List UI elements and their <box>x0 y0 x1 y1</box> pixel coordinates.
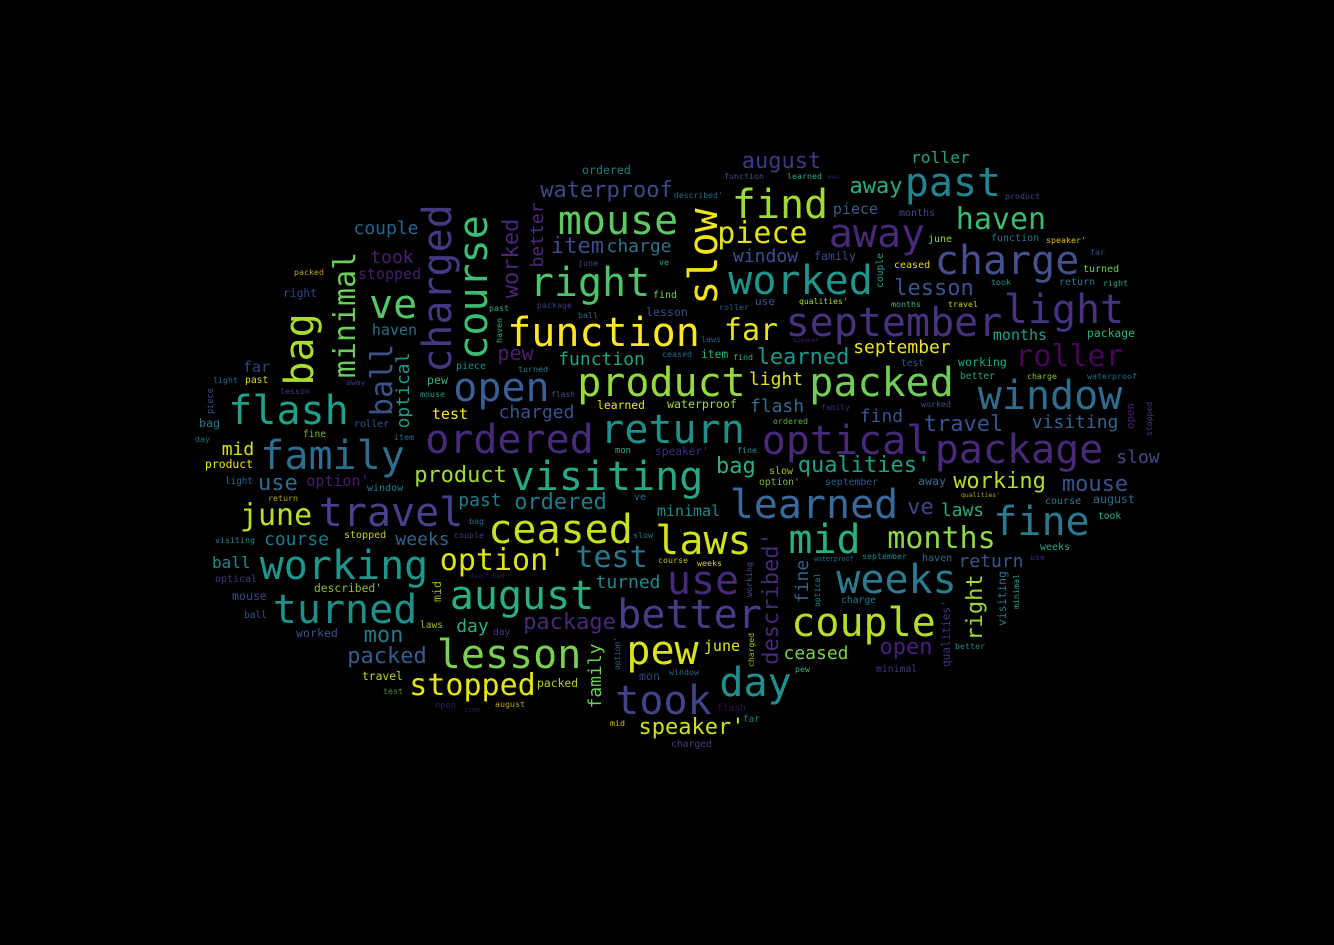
word: course (rotated): course <box>451 215 497 360</box>
rotated small words: option' <box>613 637 622 670</box>
small words: ceased <box>662 349 692 359</box>
medium words: ve <box>907 495 934 520</box>
medium words: june <box>704 637 740 655</box>
small words: learned <box>787 171 822 181</box>
small words: better <box>955 641 985 651</box>
word: charge: charge <box>935 238 1079 284</box>
small words: travel <box>362 670 403 683</box>
word: window: window <box>978 373 1123 419</box>
medium words: test <box>432 405 468 423</box>
word: september: september <box>786 300 1002 346</box>
word: function: function <box>507 310 700 356</box>
rotated medium words: better <box>527 202 548 268</box>
small words: roller <box>719 302 749 312</box>
rotated small words: couple <box>875 253 886 288</box>
medium words: minimal <box>657 502 720 520</box>
small words: item <box>464 706 480 714</box>
small words: ordered <box>582 163 631 177</box>
medium words: charged <box>499 402 574 423</box>
word: couple: couple <box>791 600 936 646</box>
word: packed: packed <box>809 360 954 406</box>
word: pew: pew <box>626 628 700 674</box>
small words: speaker' <box>1046 235 1086 245</box>
word: ceased: ceased <box>488 507 633 553</box>
word: mid: mid <box>788 517 861 563</box>
small words: away <box>918 474 946 488</box>
medium words: weeks <box>395 529 450 550</box>
small words: lesson <box>280 386 310 396</box>
rotated small words: optical <box>812 573 822 607</box>
small words: waterproof <box>667 397 737 411</box>
word: worked: worked <box>728 258 873 304</box>
small words: weeks <box>697 558 722 568</box>
small words: turned <box>518 364 548 374</box>
rotated small words: minimal <box>1011 574 1021 609</box>
small words: test <box>383 686 403 696</box>
small words: past <box>245 375 268 386</box>
small words: charge <box>1027 371 1057 381</box>
small words: course <box>1045 496 1081 507</box>
small words: stopped <box>344 530 386 541</box>
medium words: open <box>880 635 932 660</box>
word: past: past <box>905 160 1001 206</box>
small words: roller <box>354 419 389 430</box>
medium words: return <box>958 551 1024 572</box>
word: visiting: visiting <box>511 454 703 500</box>
small words: took <box>991 277 1011 287</box>
medium words: roller <box>911 148 970 167</box>
medium words: mid <box>222 439 254 460</box>
rotated medium words: ball <box>365 344 400 416</box>
small words: flash <box>717 703 746 714</box>
small words: ceased <box>894 260 930 271</box>
word: return: return <box>600 407 745 453</box>
medium words: pew <box>498 341 535 365</box>
small words: ve <box>634 492 646 503</box>
word: family: family <box>260 433 405 479</box>
small words: haven <box>922 553 952 564</box>
word: weeks: weeks <box>836 557 957 603</box>
medium words: test <box>575 540 648 575</box>
small words: product <box>205 457 253 471</box>
medium words: ball <box>212 553 251 572</box>
word: learned: learned <box>730 482 898 528</box>
small words: turned <box>1083 264 1119 275</box>
medium words: working <box>953 469 1046 494</box>
small words: fine <box>737 445 757 455</box>
small words: ball <box>244 610 267 621</box>
medium words: item <box>551 234 604 259</box>
small words: product <box>1005 191 1040 201</box>
small words: packed <box>294 267 324 277</box>
small words <box>195 163 1154 750</box>
small words: better <box>960 371 995 382</box>
small words: ball <box>578 310 598 320</box>
medium words: august <box>742 149 821 174</box>
word: optical: optical <box>762 418 930 464</box>
medium words: couple <box>354 218 419 239</box>
medium words: option' <box>440 543 566 578</box>
small words: september <box>825 477 878 488</box>
word: find: find <box>732 182 828 228</box>
small words: past <box>489 303 509 313</box>
word: took: took <box>615 678 712 724</box>
rotated small words: visiting <box>995 571 1009 626</box>
medium words: light <box>749 369 803 390</box>
word: travel: travel <box>319 490 463 536</box>
medium words <box>212 148 1160 740</box>
small words: return <box>268 493 298 503</box>
small words: worked <box>921 399 951 409</box>
small words: right <box>1103 278 1128 288</box>
medium words: stopped <box>409 668 536 703</box>
rotated small words: working <box>744 562 754 597</box>
small words: open <box>435 701 456 711</box>
medium words: september <box>853 337 951 358</box>
rotated small words: stopped <box>1144 402 1154 436</box>
small words: piece <box>456 361 486 372</box>
small words: june <box>578 258 598 268</box>
medium words: haven <box>956 202 1046 237</box>
small words: speaker' <box>655 445 709 458</box>
word: package: package <box>935 427 1103 473</box>
medium words: months <box>887 521 996 556</box>
medium words: waterproof <box>540 178 673 203</box>
small words: day <box>195 434 210 444</box>
small words: charge <box>841 595 876 606</box>
medium words: stopped <box>358 265 421 283</box>
small words: visiting <box>215 535 255 545</box>
medium words: day <box>456 616 489 637</box>
word: away: away <box>829 211 925 257</box>
small words: pew <box>427 373 448 387</box>
small words: package <box>1087 326 1135 340</box>
word: bag (rotated): bag <box>277 313 323 386</box>
medium words: course <box>264 529 329 550</box>
word: laws: laws <box>655 518 752 564</box>
word: slow (rotated): slow <box>681 207 727 305</box>
medium words: ceased <box>784 643 849 664</box>
word: fine: fine <box>993 499 1090 545</box>
rotated small words: qualities' <box>940 600 953 667</box>
small words: find <box>733 352 753 362</box>
large words <box>228 160 1124 724</box>
small words: waterproof <box>1087 371 1137 381</box>
medium words: option' <box>306 472 370 490</box>
word: lesson: lesson <box>437 632 581 678</box>
medium words: far <box>724 313 778 348</box>
small words: laws <box>701 334 721 344</box>
small words: far <box>743 714 760 725</box>
small words: course <box>658 555 688 565</box>
medium words: lesson <box>894 276 974 301</box>
small words: slow <box>769 466 794 477</box>
small words: mon <box>615 446 631 456</box>
small words: packed <box>537 676 578 690</box>
medium words: find <box>860 406 903 427</box>
word: mouse: mouse <box>558 198 678 244</box>
small words: lesson <box>646 305 688 319</box>
small words: pew <box>795 664 810 674</box>
small words: travel <box>948 299 978 309</box>
small words: mon <box>828 174 839 181</box>
small words: light <box>225 476 253 487</box>
medium words: flash <box>750 396 804 417</box>
small words: away <box>346 378 365 387</box>
medium words: far <box>243 358 270 376</box>
medium words: travel <box>924 412 1003 437</box>
rotated medium words: worked <box>499 219 524 298</box>
medium words: qualities' <box>798 453 930 478</box>
small words: bag <box>469 516 484 526</box>
medium words: piece <box>833 200 878 218</box>
small words: right <box>283 287 317 300</box>
small words: speaker' <box>793 337 823 344</box>
medium words: turned <box>596 572 661 593</box>
small words: light <box>213 375 238 385</box>
rotated small words: haven <box>494 318 504 343</box>
medium words: laws <box>941 500 984 521</box>
medium words: past <box>458 490 502 511</box>
small words: described' <box>314 582 382 595</box>
rotated small words <box>206 253 1154 670</box>
word: light: light <box>1004 287 1124 333</box>
small words: ve <box>659 257 669 267</box>
small words: window <box>669 667 699 677</box>
word: ordered: ordered <box>425 417 594 463</box>
medium words: use <box>258 471 298 496</box>
word: flash: flash <box>228 388 349 434</box>
small words: described' <box>674 190 723 200</box>
small words: window <box>367 483 404 494</box>
medium words: bag <box>716 454 756 479</box>
small words: learned <box>597 398 645 412</box>
medium words: charge <box>606 236 672 257</box>
word: use: use <box>667 558 739 604</box>
word: working: working <box>260 543 428 589</box>
small words: ordered <box>773 416 808 426</box>
rotated medium words: optical <box>393 353 414 428</box>
small words: june <box>928 234 952 245</box>
medium words: away <box>850 174 902 199</box>
medium words: speaker' <box>638 715 744 740</box>
medium words: function <box>558 349 645 370</box>
word: ve: ve <box>369 282 417 328</box>
medium words: roller <box>1015 339 1124 374</box>
small words: family <box>814 249 856 263</box>
small words: qualities' <box>799 296 848 306</box>
medium words: mon <box>364 623 403 648</box>
small words: minimal <box>876 664 917 675</box>
small words: function <box>724 171 764 181</box>
medium words: visiting <box>1032 412 1118 433</box>
small words: mouse <box>232 589 267 603</box>
small words: took <box>1098 511 1121 522</box>
medium words: slow <box>1116 447 1160 468</box>
word: open: open <box>453 365 550 411</box>
rotated small words: piece <box>206 388 216 414</box>
small words: item <box>394 432 414 442</box>
rotated small words: open <box>1124 403 1137 429</box>
word: day: day <box>719 660 792 706</box>
small words: function <box>991 233 1039 244</box>
small words: find <box>653 290 677 301</box>
small words: use <box>1030 552 1045 562</box>
word: charged (rotated): charged <box>415 204 461 373</box>
medium words: packed <box>347 644 427 669</box>
small words: fine <box>303 429 326 440</box>
medium words: window <box>733 246 798 267</box>
medium words: months <box>993 326 1047 344</box>
rotated medium words: fine <box>792 560 813 603</box>
small words: optical <box>215 574 257 585</box>
small words: slow <box>633 530 653 540</box>
small words: mouse <box>420 389 445 399</box>
medium words: took <box>370 247 414 268</box>
small words: worked <box>296 626 338 640</box>
small words: laws <box>420 620 443 631</box>
word: better: better <box>617 592 762 638</box>
small words: package <box>537 300 572 310</box>
small words: flash <box>551 390 575 399</box>
small words: return <box>1059 277 1095 288</box>
small words: august <box>1093 492 1135 506</box>
word: turned: turned <box>273 587 417 633</box>
small words: bag <box>199 416 220 430</box>
small words: working <box>958 355 1007 369</box>
small words: months <box>891 299 921 309</box>
rotated medium words: minimal <box>328 252 363 378</box>
medium words: haven <box>372 321 417 339</box>
rotated small words: mid <box>430 581 444 602</box>
rotated medium words: family <box>585 643 606 708</box>
rotated small words: charged <box>746 633 756 667</box>
medium words: package <box>523 610 616 635</box>
small words: september <box>862 551 907 561</box>
small words: family <box>821 403 850 412</box>
small words: test <box>901 358 924 369</box>
medium words: product <box>414 463 507 488</box>
small words: mid <box>610 718 625 728</box>
small words: mon <box>639 669 660 683</box>
medium words: learned <box>757 345 849 370</box>
small words: item <box>701 348 728 361</box>
small words: described' <box>470 573 508 580</box>
word: product: product <box>577 360 746 406</box>
medium words: june <box>240 498 312 533</box>
small words: qualities' <box>961 491 1000 499</box>
small words: waterproof <box>814 555 854 563</box>
word: right: right <box>530 260 650 306</box>
small words: charged <box>671 739 712 750</box>
rotated medium words <box>328 202 988 708</box>
word: august: august <box>450 573 594 619</box>
small words: day <box>493 627 511 638</box>
medium words: piece <box>717 216 808 251</box>
small words: august <box>495 699 525 709</box>
small words: months <box>899 208 935 219</box>
small words: far <box>1090 247 1105 257</box>
small words: couple <box>454 530 484 540</box>
medium words: ordered <box>514 490 607 515</box>
rotated medium words: described' <box>759 532 784 665</box>
small words: option' <box>759 477 800 488</box>
rotated medium words: right <box>963 574 988 641</box>
medium words: mouse <box>1062 472 1128 497</box>
small words: use <box>755 295 775 308</box>
small words: weeks <box>1040 542 1070 553</box>
